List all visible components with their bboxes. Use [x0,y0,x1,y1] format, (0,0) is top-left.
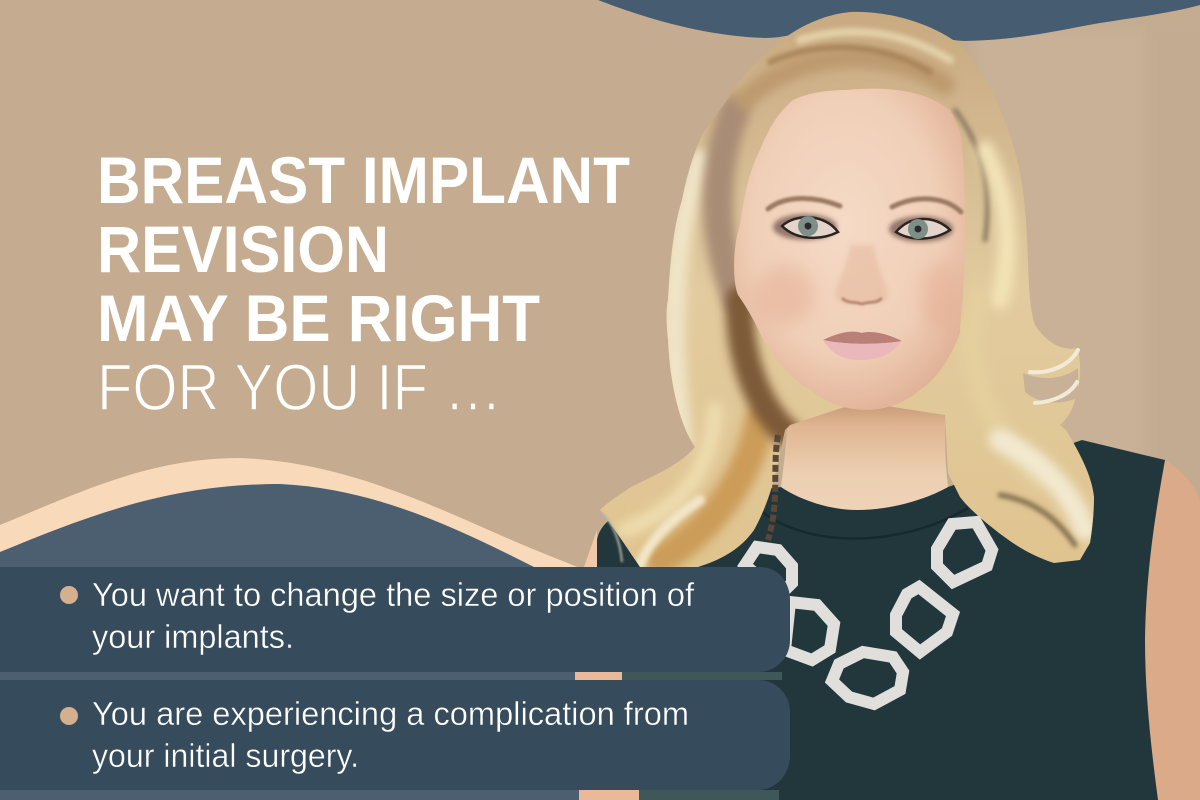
reason text: You want to change the size or position of [92,576,695,613]
reason text: your implants. [92,618,294,655]
collar seam [762,508,968,539]
curl highlights [1030,350,1078,403]
eye shadow [773,214,953,242]
title: FOR YOU IF … [97,350,502,424]
background right tone [975,20,1200,550]
title: MAY BE RIGHT [97,281,540,355]
nose [835,245,888,304]
curl gap [1023,368,1078,403]
lips [823,332,902,360]
top wave [598,0,1200,41]
reason text [92,695,689,774]
shoulder skin sliver [584,530,597,567]
cheek blush [755,261,960,329]
bullet [60,586,78,604]
title [97,143,630,424]
panel: second reason [0,680,790,790]
reason text: your initial surgery. [92,737,359,774]
reason text [92,576,695,655]
portrait [584,0,1200,800]
bottom peach wave [0,458,585,680]
bullet [60,707,78,725]
panel: first reason [0,567,790,672]
hair strands [625,32,1085,565]
neck [781,390,948,510]
title: REVISION [97,212,389,286]
necklace [745,522,992,704]
separator strips [0,672,782,800]
title: BREAST IMPLANT [97,143,630,217]
face [734,89,965,410]
necklace chain [768,435,778,540]
right arm [1145,460,1200,800]
hair wisps over dress [600,512,622,562]
reason text: You are experiencing a complication from [92,695,689,732]
hair [590,0,1110,580]
eyebrows [768,198,961,212]
bottom dark wave [0,484,580,680]
eyes [782,216,950,239]
dress [597,440,1165,800]
